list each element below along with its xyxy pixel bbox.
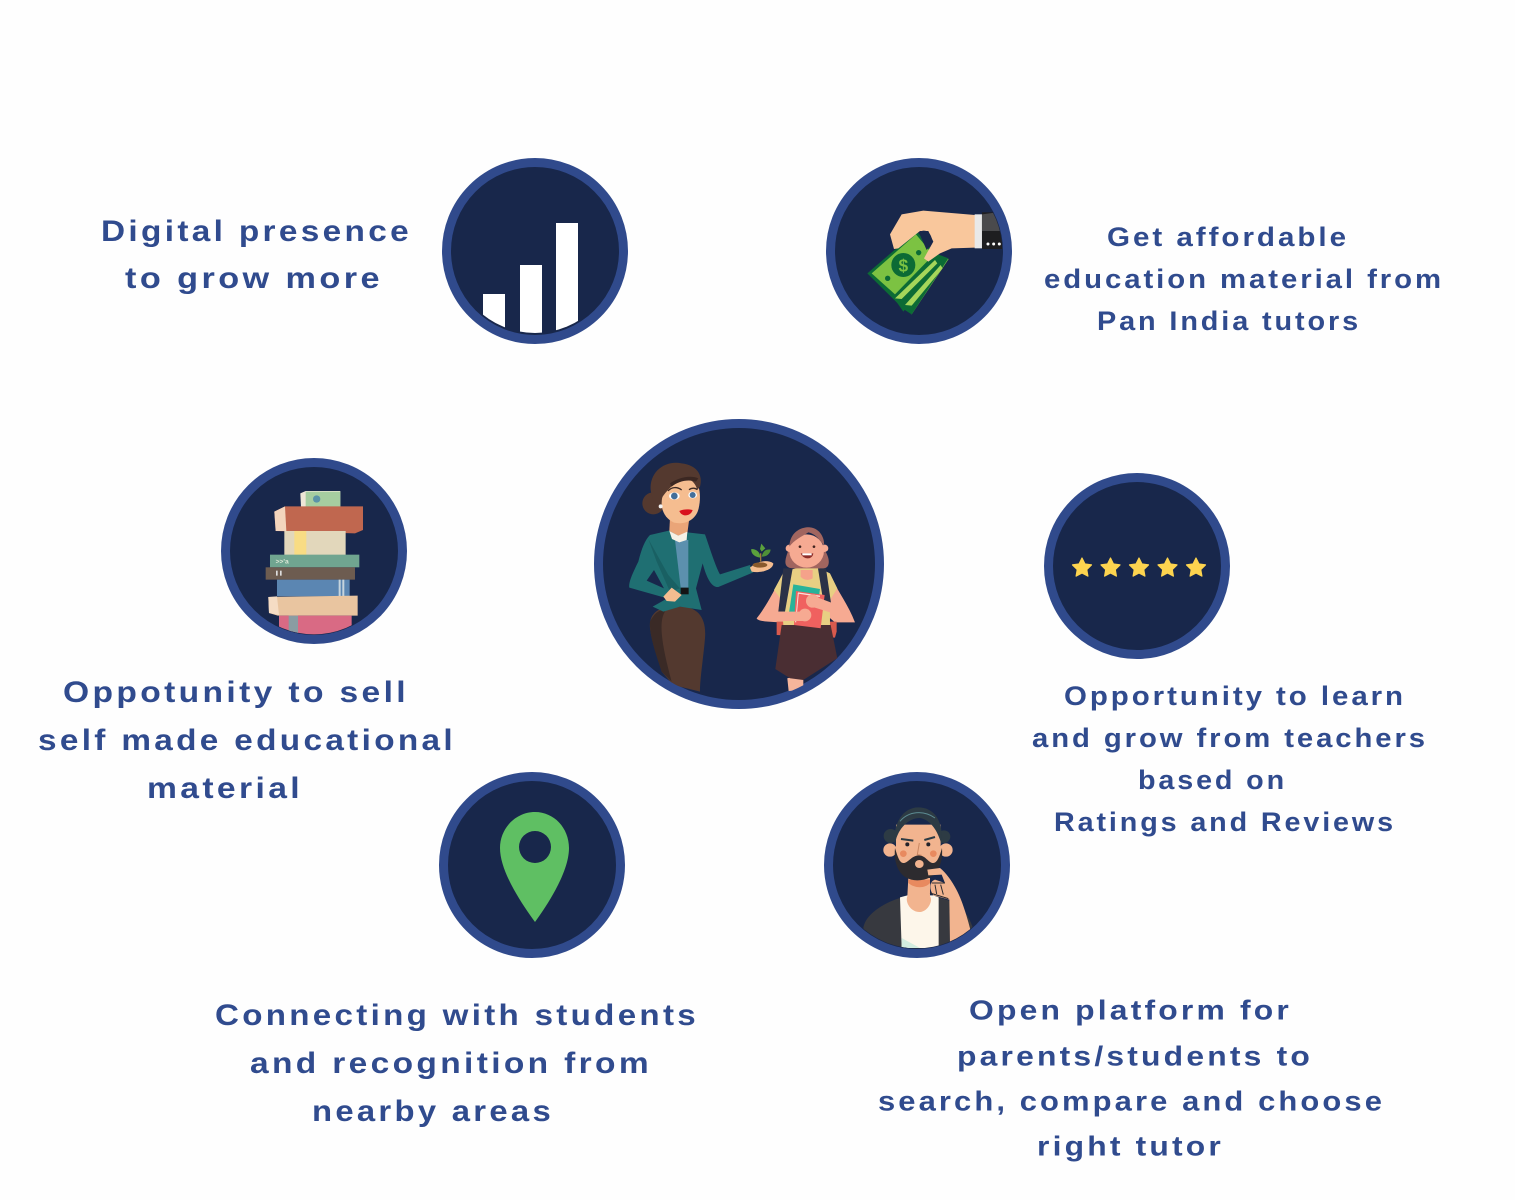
- icon: hand with money: [830, 162, 1008, 340]
- text: affordable material: [1044, 222, 1444, 336]
- text: connecting with students: [215, 999, 699, 1128]
- text: ratings and reviews: Opportunity to learn: [1064, 681, 1406, 711]
- text: affordable material: Get affordable: [1107, 222, 1349, 252]
- panel: open platform: [828, 776, 1385, 1162]
- text: connecting with students: Connecting with students: [215, 999, 699, 1032]
- text: ratings and reviews: based on: [1138, 765, 1287, 795]
- text: open platform: search, compare and choose: [878, 1086, 1385, 1116]
- panel: affordable material: [830, 162, 1444, 340]
- text: sell material: [38, 676, 456, 805]
- text: open platform: Open platform for: [969, 994, 1292, 1026]
- text: open platform: [878, 994, 1385, 1162]
- text: open platform: parents/students to: [957, 1040, 1313, 1072]
- text: affordable material: Pan India tutors: [1097, 306, 1361, 336]
- icon: bar chart: [446, 162, 624, 345]
- icon: location pin: [444, 776, 620, 954]
- icon: stack of books: >>'a: [276, 559, 289, 566]
- text: sell material: self made educational: [38, 724, 456, 757]
- text: sell material: material: [147, 772, 303, 805]
- panel: sell material: [38, 462, 456, 805]
- panel: ratings and reviews: [1032, 478, 1428, 837]
- text: connecting with students: nearby areas: [312, 1095, 554, 1128]
- text: ratings and reviews: Ratings and Reviews: [1054, 807, 1396, 837]
- panel: connecting with students: [215, 776, 699, 1128]
- text: digital presence: Digital presence: [101, 215, 412, 248]
- text: ratings and reviews: [1032, 681, 1428, 837]
- text: connecting with students: and recognition from: [250, 1047, 652, 1080]
- icon: thinking man: [828, 776, 1006, 955]
- icon: teacher and student: [598, 424, 880, 704]
- panel: digital presence: [101, 162, 624, 345]
- text: affordable material: education material from: [1044, 264, 1444, 294]
- text: ratings and reviews: and grow from teachers: [1032, 723, 1428, 753]
- icon: hand with money: $: [899, 256, 909, 276]
- text: sell material: Oppotunity to sell: [63, 676, 409, 709]
- icon: stack of books: [226, 462, 402, 640]
- panel: centre illustration: [598, 424, 880, 704]
- text: open platform: right tutor: [1037, 1130, 1224, 1162]
- text: digital presence: [101, 215, 412, 295]
- text: digital presence: to grow more: [125, 262, 383, 295]
- icon: five stars: [1048, 478, 1226, 654]
